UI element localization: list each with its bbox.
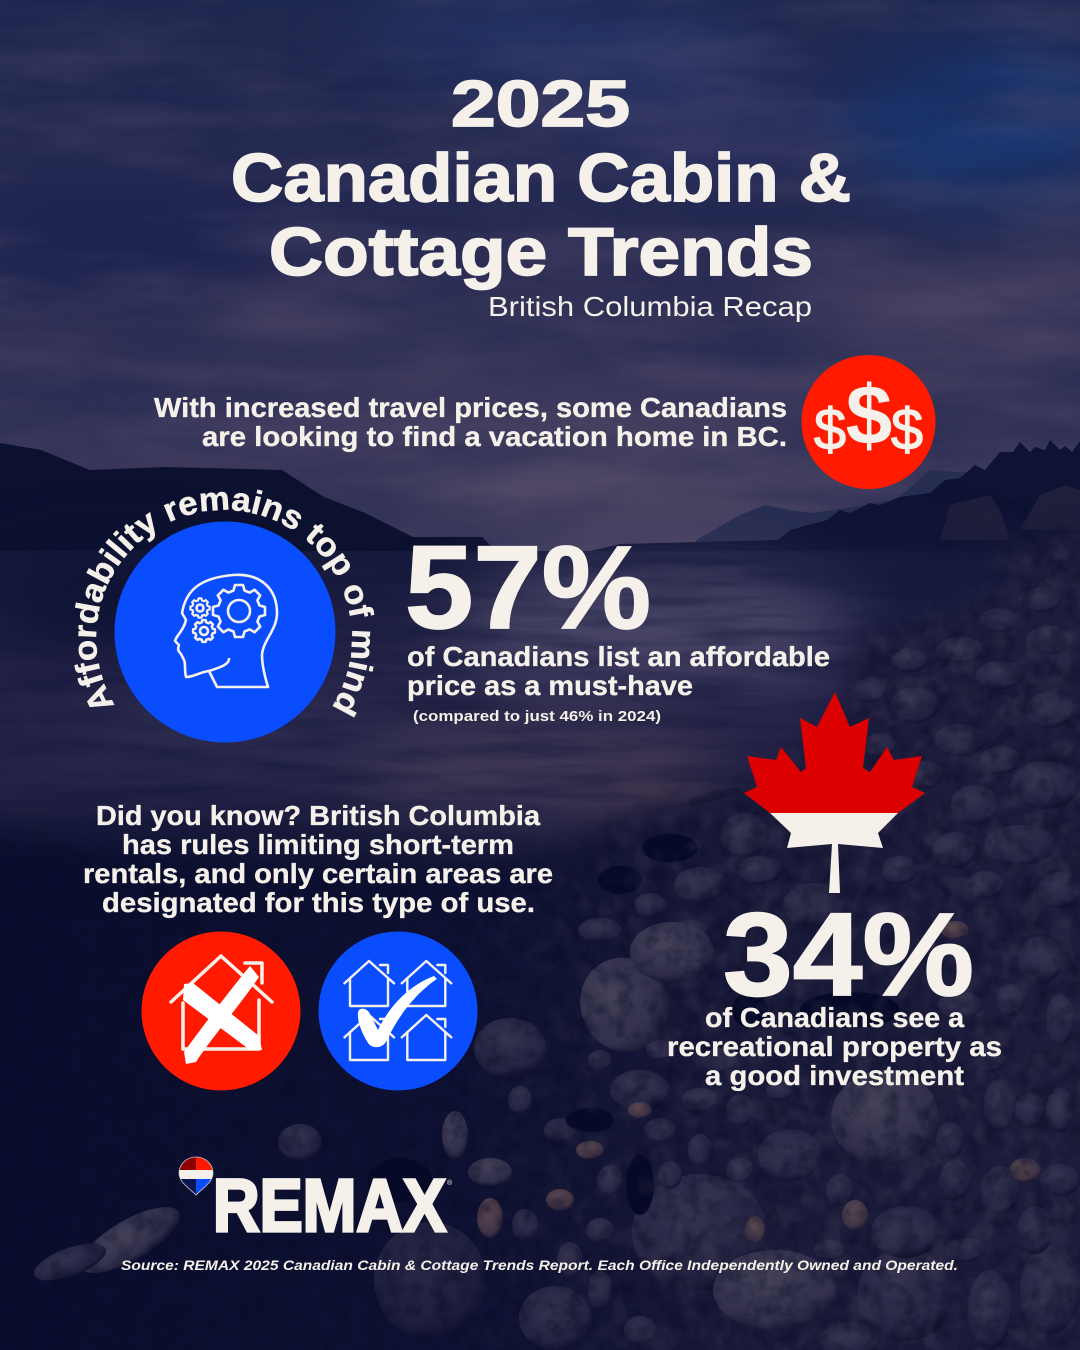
travel prices text: With increased travel prices, some Canadians bbox=[154, 392, 787, 423]
statistic: 57 percent: price as a must-have bbox=[407, 670, 693, 701]
rocks: large boulders bbox=[30, 922, 1080, 1350]
source note: Source: REMAX 2025 Canadian Cabin & Cottage Trends Report. Each Office Independently Owned and Operated. bbox=[121, 1257, 958, 1273]
statistic: 34 percent: 34% bbox=[723, 889, 974, 1021]
rocks: dark gaps bbox=[368, 776, 900, 1215]
icon: maple leaf bbox=[744, 692, 925, 893]
icon: crossed-out house bbox=[142, 932, 300, 1090]
statistic: 57 percent: 57% bbox=[405, 522, 651, 654]
title line: Cottage Trends: Cottage Trends bbox=[269, 214, 813, 290]
travel prices text: are looking to find a vacation home in BC. bbox=[202, 421, 787, 452]
statistic: 34 percent: recreational property as bbox=[667, 1031, 1002, 1062]
statistic: 57 percent: (compared to just 46% in 2024) bbox=[413, 709, 661, 725]
logo: REMAX bbox=[178, 1156, 452, 1233]
did you know text: Did you know? British Columbia bbox=[96, 800, 540, 831]
icon: dollar signs bbox=[802, 355, 936, 489]
statistic: 34 percent: a good investment bbox=[705, 1060, 964, 1091]
statistic: 34 percent: of Canadians see a bbox=[705, 1002, 964, 1033]
rocks: upper shore bbox=[578, 588, 1080, 1046]
statistic: 57 percent bbox=[405, 522, 830, 725]
far mountains bbox=[696, 470, 1080, 555]
logo: REMAX: ® bbox=[447, 1179, 453, 1187]
icon: dollar signs: $ bbox=[814, 397, 846, 462]
travel prices text bbox=[154, 392, 787, 452]
logo: REMAX: REMAX bbox=[213, 1164, 446, 1247]
statistic: 34 percent bbox=[667, 889, 1002, 1091]
cliff faces bbox=[940, 485, 1080, 540]
icon: head with gears bbox=[114, 522, 336, 742]
icon: balloon bbox=[178, 1156, 214, 1197]
curved heading: affordability: Affordability remains top of mind bbox=[74, 490, 374, 718]
did you know text: rentals, and only certain areas are bbox=[83, 858, 553, 889]
rocks: warm pebbles bbox=[477, 921, 1040, 1244]
title line: year: 2025 bbox=[451, 67, 630, 140]
did you know text bbox=[83, 800, 553, 918]
subtitle: British Columbia Recap bbox=[488, 291, 812, 322]
title line: Canadian Cabin &: Canadian Cabin & bbox=[231, 140, 851, 216]
title bbox=[231, 67, 851, 322]
icon: houses with check mark bbox=[318, 932, 478, 1090]
icon: dollar signs: $ bbox=[846, 368, 892, 462]
statistic: 57 percent: of Canadians list an affordable bbox=[407, 641, 830, 672]
left mountain bbox=[0, 443, 496, 553]
rocky shore bbox=[0, 500, 1080, 1350]
sky with clouds bbox=[0, 0, 1080, 560]
rocks: pebbles bbox=[508, 1040, 1080, 1350]
pebble texture bbox=[588, 547, 1080, 1350]
lake water bbox=[0, 551, 1080, 881]
did you know text: designated for this type of use. bbox=[102, 887, 535, 918]
icon: dollar signs: $ bbox=[891, 397, 923, 462]
did you know text: has rules limiting short-term bbox=[122, 829, 514, 860]
right tree line bbox=[586, 440, 1080, 555]
